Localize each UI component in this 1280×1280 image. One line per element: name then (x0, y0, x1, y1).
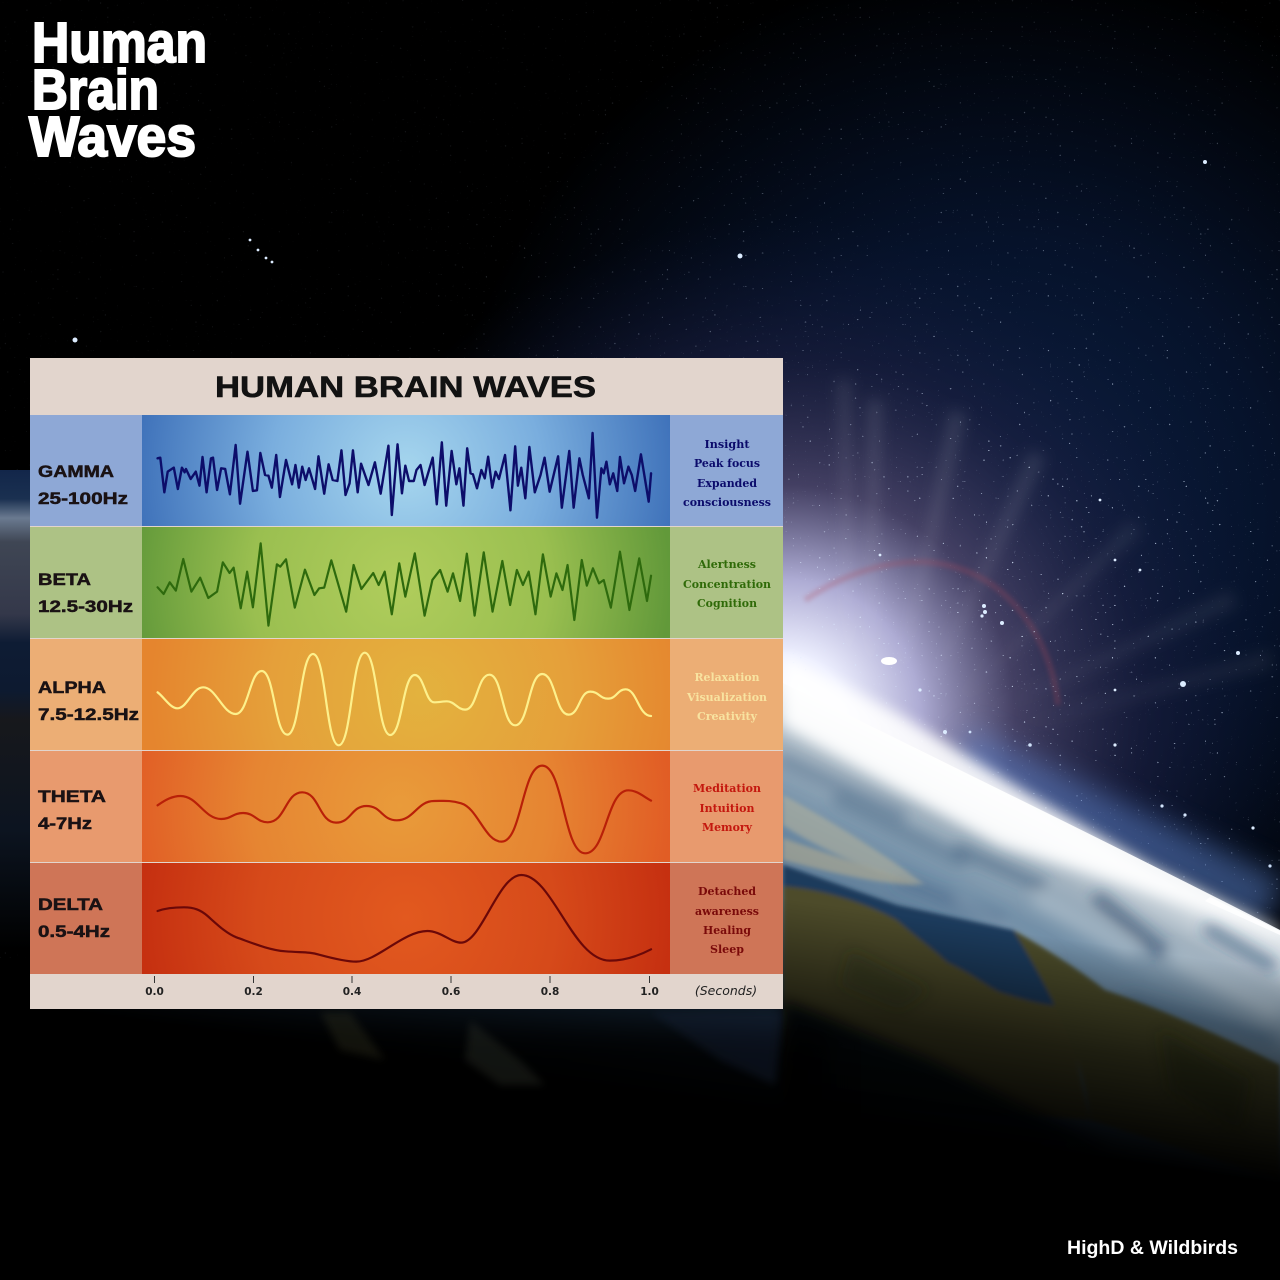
row: gamma: Expanded (697, 476, 757, 490)
row: delta: awareness (695, 904, 759, 918)
row: gamma (30, 415, 783, 526)
row: beta: Concentration (683, 577, 772, 591)
credit: HighD & Wildbirds (1067, 1238, 1238, 1259)
row: beta: BETA (38, 570, 91, 589)
left edge of earth (0, 470, 30, 950)
panel: brain waves chart (30, 358, 783, 1009)
title (29, 12, 207, 168)
land (783, 886, 1090, 1120)
row: gamma: GAMMA (38, 462, 114, 481)
lens flare ring (805, 562, 1058, 705)
row: delta (30, 863, 783, 974)
row: delta: DELTA (38, 895, 103, 914)
row: alpha: 7.5-12.5Hz (38, 705, 139, 724)
row: theta: Intuition (700, 801, 755, 815)
bright band along the limb (783, 655, 1280, 936)
time axis (145, 976, 757, 998)
row: alpha: Relaxation (694, 670, 760, 684)
row: theta: 4-7Hz (38, 814, 92, 833)
row: beta: Alertness (697, 557, 756, 571)
time axis: 0.0 (145, 986, 164, 998)
title: Human (32, 12, 207, 74)
row: gamma: 25-100Hz (38, 489, 128, 508)
time axis: 0.4 (343, 986, 361, 998)
row: gamma: consciousness (683, 495, 771, 509)
time axis: (Seconds) (695, 983, 757, 998)
row: alpha (30, 639, 783, 750)
row: alpha: ALPHA (38, 678, 106, 697)
row: delta: 0.5-4Hz (38, 922, 110, 941)
time axis: 0.2 (244, 986, 263, 998)
row: theta: THETA (38, 787, 106, 806)
row: alpha: Visualization (686, 690, 768, 704)
row: delta: Sleep (710, 942, 744, 956)
time axis: 1.0 (640, 986, 659, 998)
row: delta: Detached (698, 884, 756, 898)
row: theta: Memory (702, 820, 752, 834)
row: alpha: Creativity (697, 709, 757, 723)
row: gamma: Insight (704, 437, 750, 451)
chart heading: HUMAN BRAIN WAVES (215, 371, 596, 404)
title: Waves (29, 106, 196, 168)
ocean (783, 865, 1075, 1012)
row: theta (30, 751, 783, 862)
title: Brain (32, 59, 159, 121)
row: beta (30, 527, 783, 638)
row: beta: 12.5-30Hz (38, 597, 133, 616)
row: gamma: Peak focus (694, 456, 760, 470)
time axis: 0.6 (442, 986, 460, 998)
row: beta: Cognition (697, 596, 758, 610)
time axis: 0.8 (541, 986, 559, 998)
row: theta: Meditation (693, 781, 762, 795)
row: delta: Healing (703, 923, 751, 937)
